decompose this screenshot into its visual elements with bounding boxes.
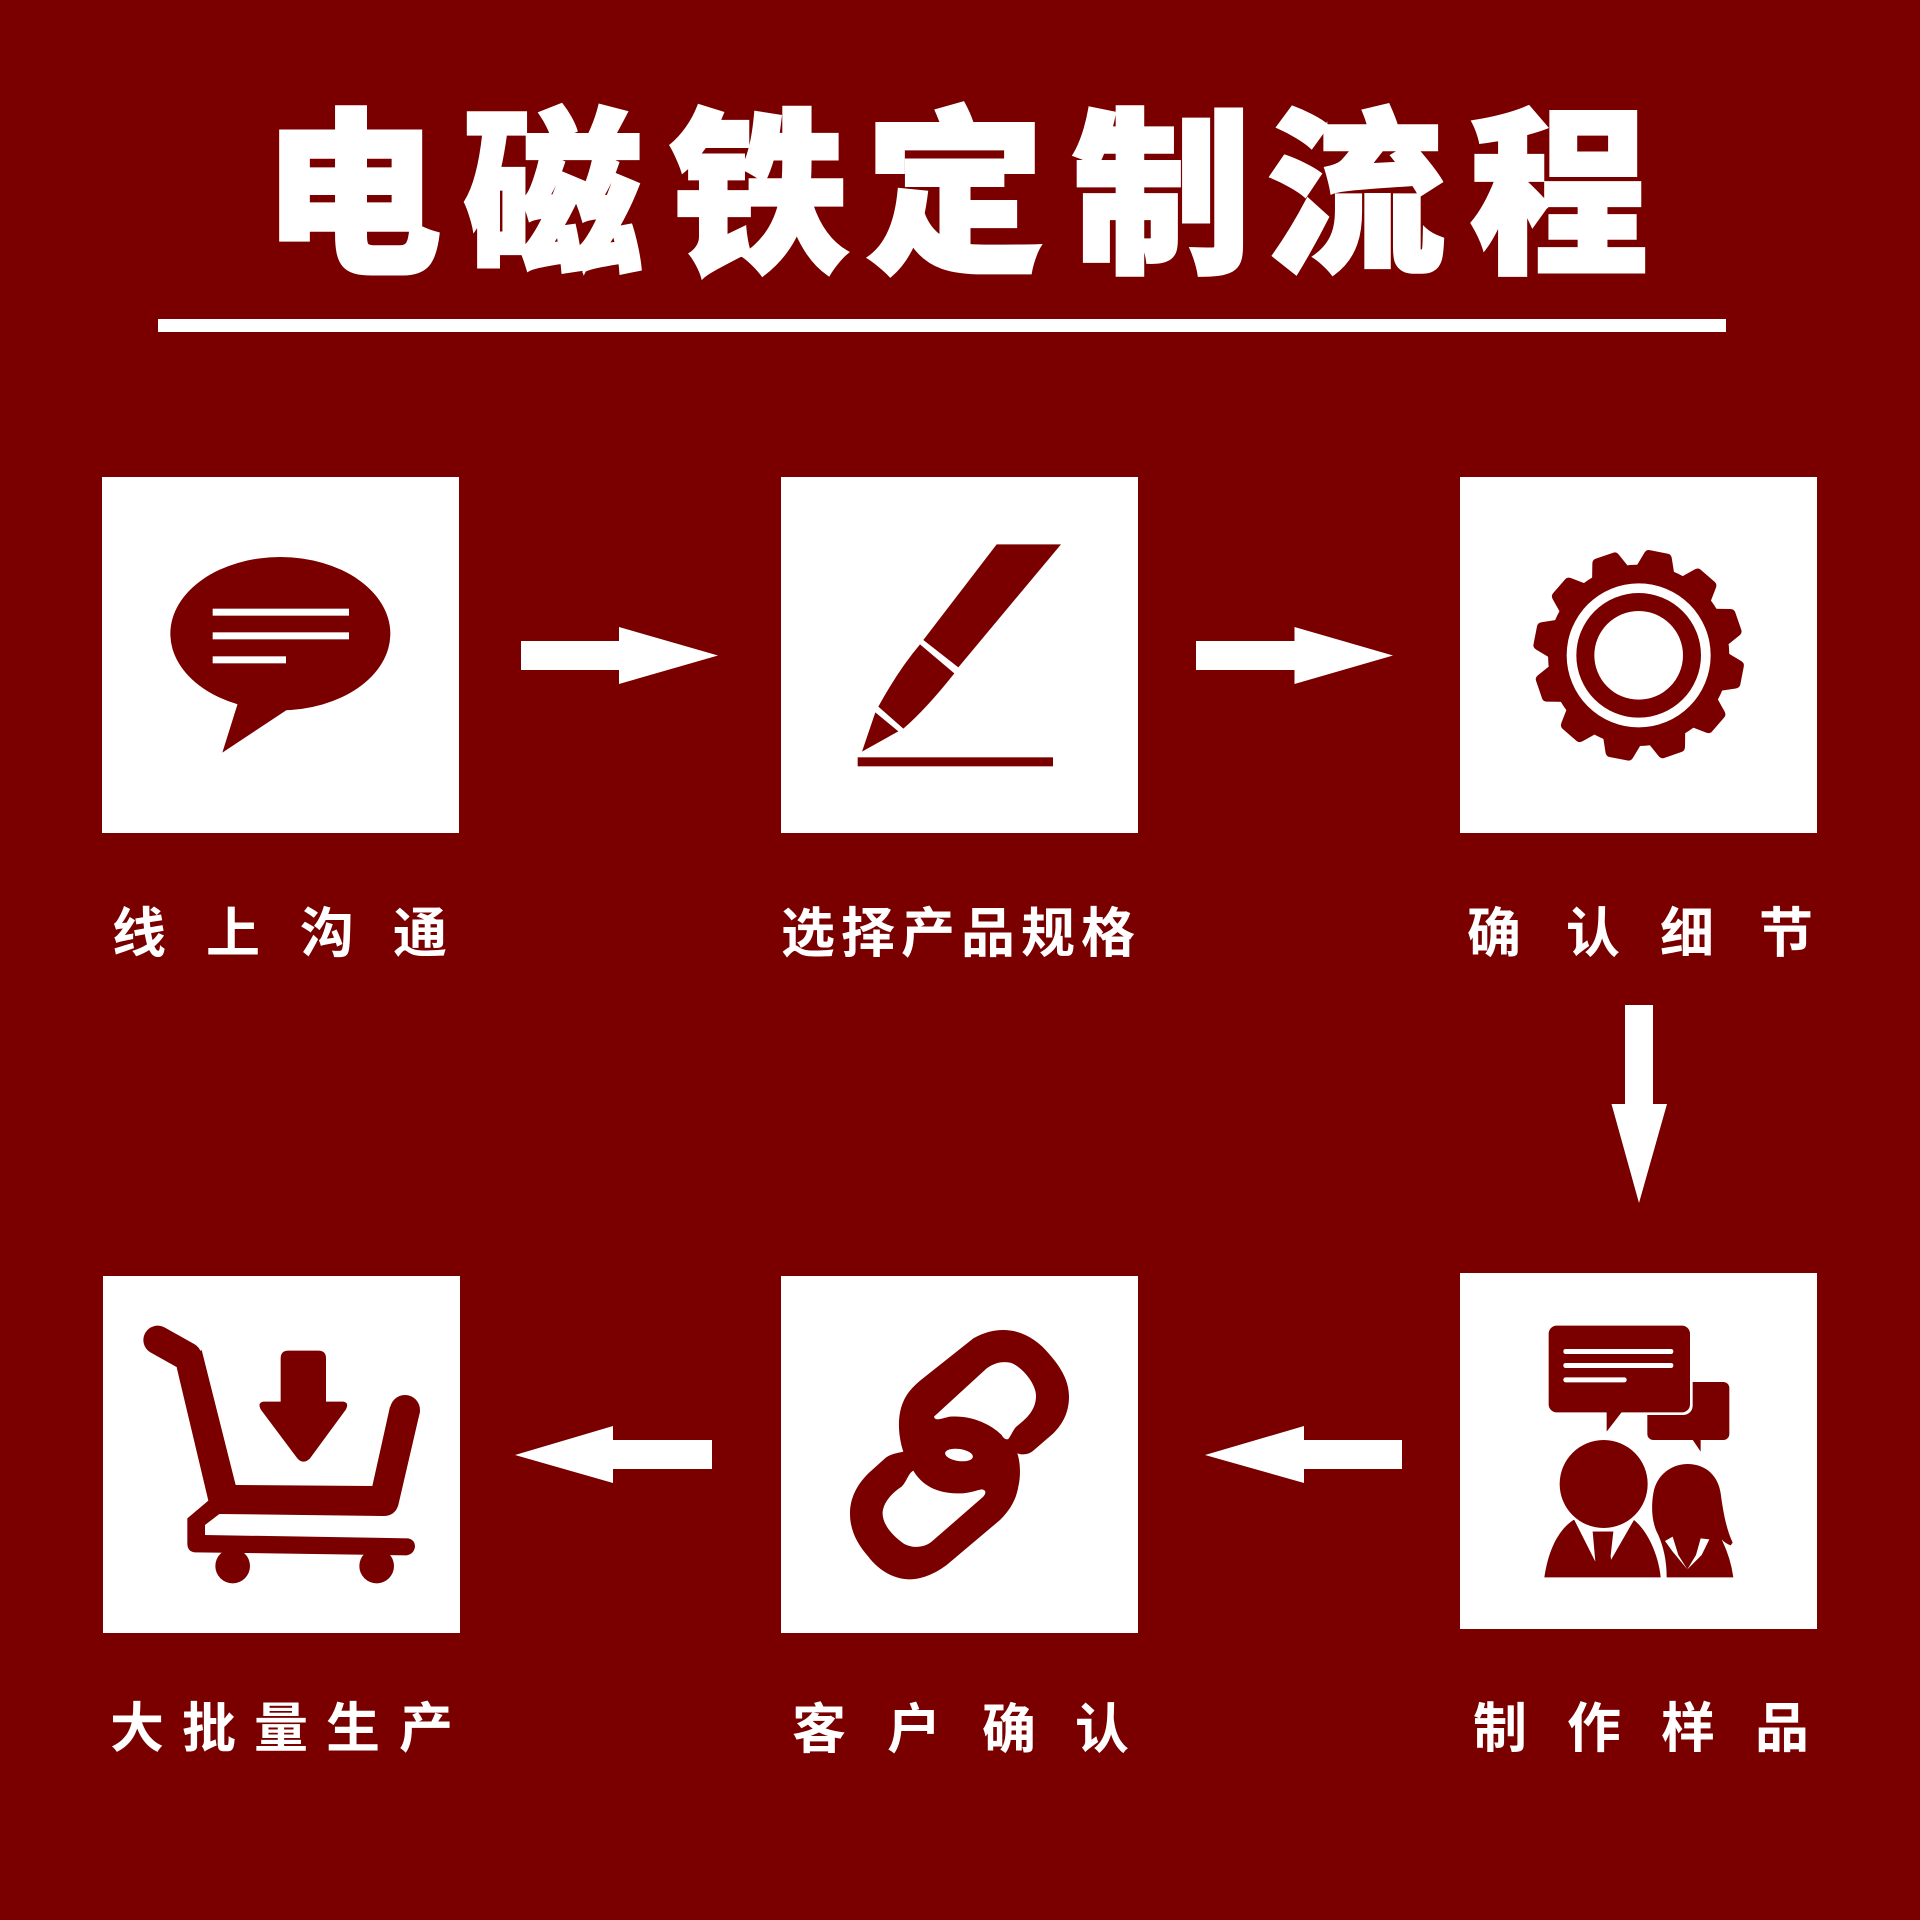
icon: shopping cart with down arrow — [158, 1340, 420, 1583]
label: customer confirmation: 客户确认 — [792, 1700, 1129, 1760]
panel: make samples — [1460, 1273, 1817, 1629]
label: choose specification: 选择产品规格 — [781, 904, 1135, 964]
arrow: step 5 to 6 — [515, 1426, 712, 1483]
label: online communication: 线上沟通 — [112, 904, 447, 964]
icon: pen — [858, 544, 1061, 766]
title: 电磁铁定制流程 — [263, 97, 1648, 296]
label: confirm details: 确认细节 — [1467, 904, 1813, 964]
arrow: step 4 to 5 — [1205, 1426, 1402, 1483]
icon: people talking — [1544, 1323, 1733, 1577]
icon: chain link — [850, 1330, 1069, 1579]
label: make samples: 制作样品 — [1473, 1699, 1809, 1759]
arrow: step 2 to 3 — [1196, 627, 1393, 684]
arrow: step 3 to 4 — [1612, 1005, 1667, 1203]
label: mass production: 大批量生产 — [110, 1699, 453, 1759]
icon: speech bubble — [170, 557, 390, 753]
panel: online communication — [102, 477, 459, 833]
icon: gear — [1531, 548, 1746, 763]
panel: confirm details — [1460, 477, 1817, 833]
title underline — [158, 319, 1726, 332]
panel: customer confirmation — [781, 1276, 1138, 1633]
arrow: step 1 to 2 — [521, 627, 718, 684]
panel: mass production — [103, 1276, 460, 1633]
panel: choose specification — [781, 477, 1138, 833]
